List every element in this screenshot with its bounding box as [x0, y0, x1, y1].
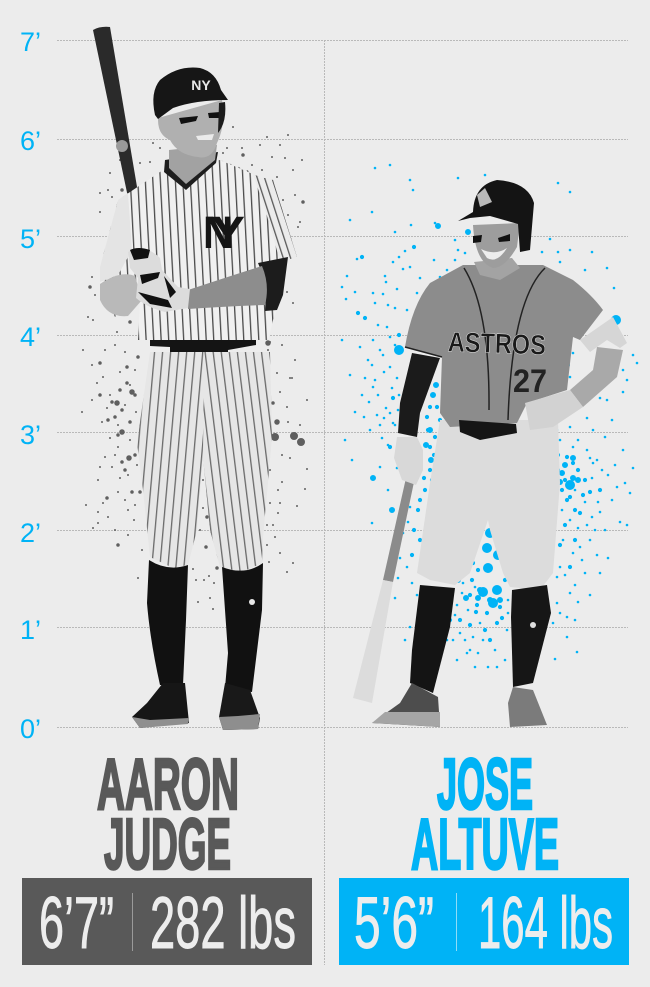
- right arm: [570, 347, 623, 407]
- height axis labels: 5’: [20, 224, 41, 254]
- height axis labels: 2’: [20, 518, 41, 548]
- player name: Aaron Judge: AARON: [97, 745, 239, 825]
- stat panel: Aaron Judge: [22, 878, 312, 965]
- blue paint splatter behind Jose Altuve: [342, 165, 637, 667]
- bat: [93, 27, 147, 250]
- helmet: [458, 180, 534, 252]
- stat panel: Jose Altuve: [339, 878, 629, 965]
- shoes: [132, 683, 189, 728]
- height axis labels: [20, 27, 41, 744]
- left arm: [100, 274, 142, 316]
- player: Aaron Judge: [93, 27, 297, 730]
- player: Jose Altuve: 27: [513, 363, 547, 399]
- face: [158, 100, 223, 157]
- belt: [459, 420, 517, 440]
- height axis labels: 7’: [20, 27, 41, 57]
- jersey lettering: ASTROS: [447, 326, 546, 361]
- player name: Jose Altuve: JOSE: [437, 745, 533, 825]
- player name: Aaron Judge: [97, 745, 239, 885]
- height axis labels: 1’: [20, 615, 41, 645]
- right glove: [525, 390, 583, 430]
- height axis labels: 3’: [20, 420, 41, 450]
- NY logo: N: [203, 207, 233, 258]
- stat panel: Jose Altuve: 5’6”: [354, 883, 434, 964]
- pants: [417, 420, 560, 590]
- belt: [150, 340, 256, 352]
- shoes: [372, 683, 440, 727]
- pants: [137, 352, 272, 572]
- gloves: [128, 249, 190, 312]
- neck and face: [474, 258, 520, 280]
- height axis labels: 6’: [20, 126, 41, 156]
- dark undersleeve: [398, 353, 440, 437]
- collar and neck: [164, 152, 218, 190]
- grey paint splatter behind Aaron Judge: [82, 127, 307, 609]
- NY logo: Y: [211, 207, 245, 258]
- bat: [383, 478, 414, 582]
- jersey: [405, 265, 603, 427]
- player name: Jose Altuve: [411, 745, 559, 885]
- jersey piping: [405, 268, 545, 420]
- height axis labels: 0’: [20, 714, 41, 744]
- left glove: [394, 437, 423, 485]
- player: Jose Altuve: [353, 180, 627, 727]
- forearm: [188, 266, 267, 309]
- player name: Aaron Judge: JUDGE: [104, 805, 231, 885]
- socks: [147, 560, 188, 685]
- socks: [410, 585, 455, 693]
- player: Aaron Judge: NY: [191, 77, 211, 93]
- helmet: [153, 68, 228, 119]
- stat panel: Aaron Judge: 282 lbs: [150, 883, 296, 964]
- sleeve band: [580, 317, 627, 352]
- stat panel: Aaron Judge: 6’7”: [39, 883, 114, 964]
- jersey: [100, 160, 297, 340]
- undersleeve: [258, 257, 288, 311]
- height axis labels: 4’: [20, 322, 41, 352]
